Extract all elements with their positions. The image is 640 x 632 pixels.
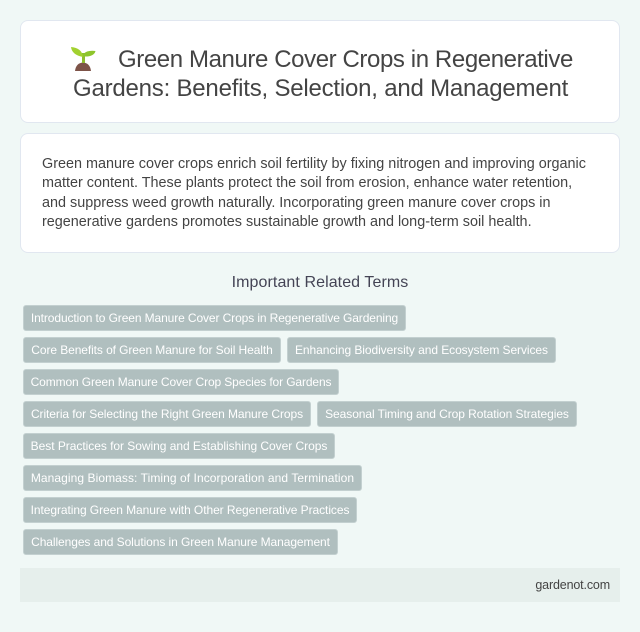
tag [23, 305, 406, 331]
tag: Criteria for Selecting the Right Green Manure Crops [31, 407, 303, 421]
tag: Introduction to Green Manure Cover Crops in Regenerative Gardening [31, 311, 398, 325]
tag: Challenges and Solutions in Green Manure Management [31, 535, 330, 549]
tag [23, 433, 335, 459]
tag [23, 465, 362, 491]
text block: summary: matter content. These plants protect the soil from erosion, enhance water retention, [42, 175, 572, 191]
tag: Managing Biomass: Timing of Incorporation and Termination [31, 471, 354, 485]
panel: title card [20, 20, 620, 123]
tag [317, 401, 577, 427]
title: Gardens: Benefits, Selection, and Management [73, 75, 568, 102]
tag: Common Green Manure Cover Crop Species for Gardens [31, 375, 331, 389]
text block: summary: and suppress weed growth naturally. Incorporating green manure cover crops in [42, 195, 550, 211]
tag [23, 497, 357, 523]
tag: Best Practices for Sowing and Establishing Cover Crops [31, 439, 327, 453]
tag: Integrating Green Manure with Other Regenerative Practices [31, 503, 349, 517]
tag: Enhancing Biodiversity and Ecosystem Services [295, 343, 548, 357]
tag: Seasonal Timing and Crop Rotation Strategies [325, 407, 569, 421]
text block: summary: Green manure cover crops enrich soil fertility by fixing nitrogen and improving organic [42, 156, 586, 172]
tag [23, 529, 338, 555]
tag [23, 369, 339, 395]
tag [23, 337, 281, 363]
tag [23, 401, 311, 427]
tag list [23, 305, 577, 555]
heading: related terms: Important Related Terms [232, 274, 408, 291]
panel: summary card [20, 133, 620, 253]
tag [287, 337, 556, 363]
text block: summary: regenerative gardens promotes sustainable growth and long-term soil health. [42, 214, 532, 230]
footer bar [20, 568, 620, 602]
icon: seedling [71, 47, 96, 71]
footer text: gardenot.com [535, 578, 610, 592]
tag: Core Benefits of Green Manure for Soil Health [31, 343, 273, 357]
title: Green Manure Cover Crops in Regenerative [118, 46, 573, 73]
title [73, 46, 573, 102]
text block: summary [42, 156, 586, 230]
